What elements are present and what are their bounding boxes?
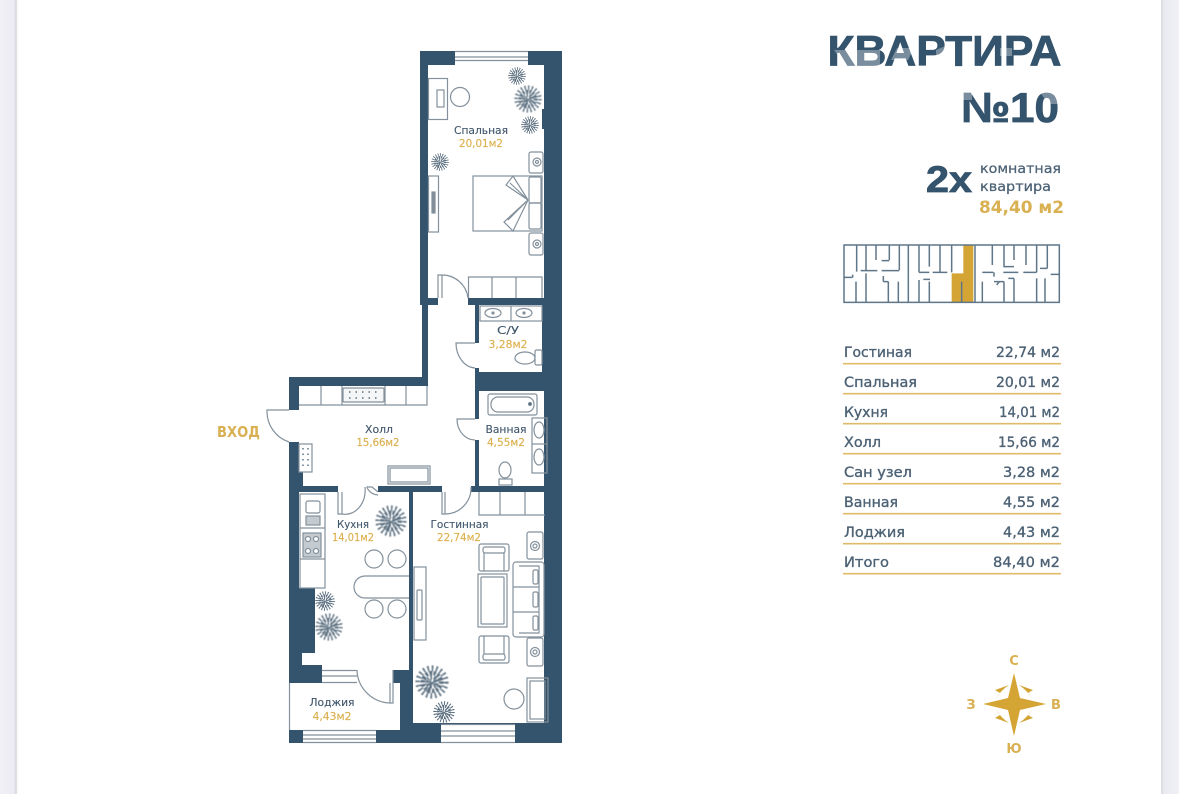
label: С/У: 3,28м2	[488, 338, 528, 351]
row: Итого: Итого	[844, 555, 889, 571]
label: Спальная	[454, 124, 508, 150]
area table	[843, 345, 1061, 574]
label: Ванная: 4,55м2	[487, 436, 525, 449]
loggia edge	[288, 683, 290, 730]
doors	[267, 275, 475, 703]
title: КВАРТИРА	[828, 28, 1062, 76]
row: Сан узел: 3,28 м2	[1003, 465, 1060, 481]
row: Спальная	[843, 375, 1061, 394]
entrance label: ВХОД	[217, 423, 260, 441]
floor key plan	[844, 245, 1059, 302]
row: Холл: Холл	[844, 435, 881, 451]
row: Кухня	[843, 405, 1061, 424]
plants: living room	[418, 668, 453, 721]
label: Лоджия: Лоджия	[310, 696, 354, 709]
row: Сан узел	[843, 465, 1061, 484]
label: Спальная: 20,01м2	[459, 137, 503, 150]
bedroom furniture	[428, 78, 543, 298]
plants: kitchen	[317, 508, 404, 638]
window: living room	[441, 724, 515, 743]
label: Спальная: Спальная	[454, 124, 508, 137]
compass: С	[1009, 654, 1019, 669]
row: Кухня: Кухня	[844, 405, 888, 421]
label: С/У: С/У	[497, 324, 519, 337]
row: Гостиная	[843, 345, 1061, 364]
walls	[289, 51, 562, 743]
floor plan	[267, 51, 562, 743]
row: Холл	[843, 435, 1061, 454]
living room furniture	[414, 492, 548, 722]
left page edge	[0, 0, 19, 794]
right page edge	[1161, 0, 1179, 794]
highlighted apartment	[952, 245, 973, 302]
window: loggia door	[322, 670, 357, 683]
row: Лоджия: 4,43 м2	[1003, 525, 1060, 541]
compass: Ю	[1006, 742, 1022, 757]
plants: bedroom	[433, 69, 539, 169]
row: Кухня: 14,01 м2	[999, 405, 1060, 421]
title	[828, 28, 1062, 131]
row: Гостиная: 22,74 м2	[996, 345, 1060, 361]
label: Ванная	[486, 423, 526, 449]
hall furniture	[299, 386, 430, 484]
apartment type: комнатная	[980, 161, 1061, 177]
row: Лоджия	[843, 525, 1061, 544]
label: Кухня: Кухня	[337, 518, 369, 531]
row: Ванная: Ванная	[844, 495, 898, 511]
apartment type: 2х	[926, 159, 972, 200]
row: Гостиная: Гостиная	[844, 345, 912, 361]
label: Лоджия	[310, 696, 354, 723]
compass	[966, 654, 1061, 757]
label: Холл	[356, 423, 400, 449]
label: Холл: 15,66м2	[356, 436, 400, 449]
row: Ванная: 4,55 м2	[1003, 495, 1060, 511]
apartment type: 84,40 м2	[979, 198, 1064, 218]
label: Кухня	[332, 518, 374, 544]
label: Лоджия: 4,43м2	[312, 710, 352, 723]
row: Спальная: 20,01 м2	[996, 375, 1060, 391]
compass: В	[1051, 698, 1061, 713]
row: Лоджия: Лоджия	[844, 525, 905, 541]
row: Итого	[843, 555, 1061, 574]
row: Сан узел: Сан узел	[844, 465, 912, 481]
title: №10	[961, 84, 1059, 131]
apartment type	[926, 159, 1064, 218]
row: Холл: 15,66 м2	[998, 435, 1060, 451]
label: С/У	[488, 324, 528, 351]
bathroom С/У fixtures	[480, 306, 542, 365]
label: Гостинная	[430, 518, 488, 544]
label: Холл: Холл	[365, 423, 393, 436]
window: bedroom	[455, 51, 528, 65]
label: Гостинная: 22,74м2	[437, 531, 481, 544]
label: Гостинная: Гостинная	[430, 518, 488, 531]
window: loggia	[303, 730, 376, 743]
label: Ванная: Ванная	[486, 423, 526, 436]
label: Кухня: 14,01м2	[332, 531, 374, 544]
row: Спальная: Спальная	[844, 375, 917, 391]
bathroom fixtures	[488, 394, 547, 485]
row: Итого: 84,40 м2	[993, 555, 1060, 571]
apartment type: квартира	[980, 179, 1051, 195]
compass: З	[966, 698, 976, 713]
row: Ванная	[843, 495, 1061, 514]
kitchen furniture	[300, 494, 409, 618]
